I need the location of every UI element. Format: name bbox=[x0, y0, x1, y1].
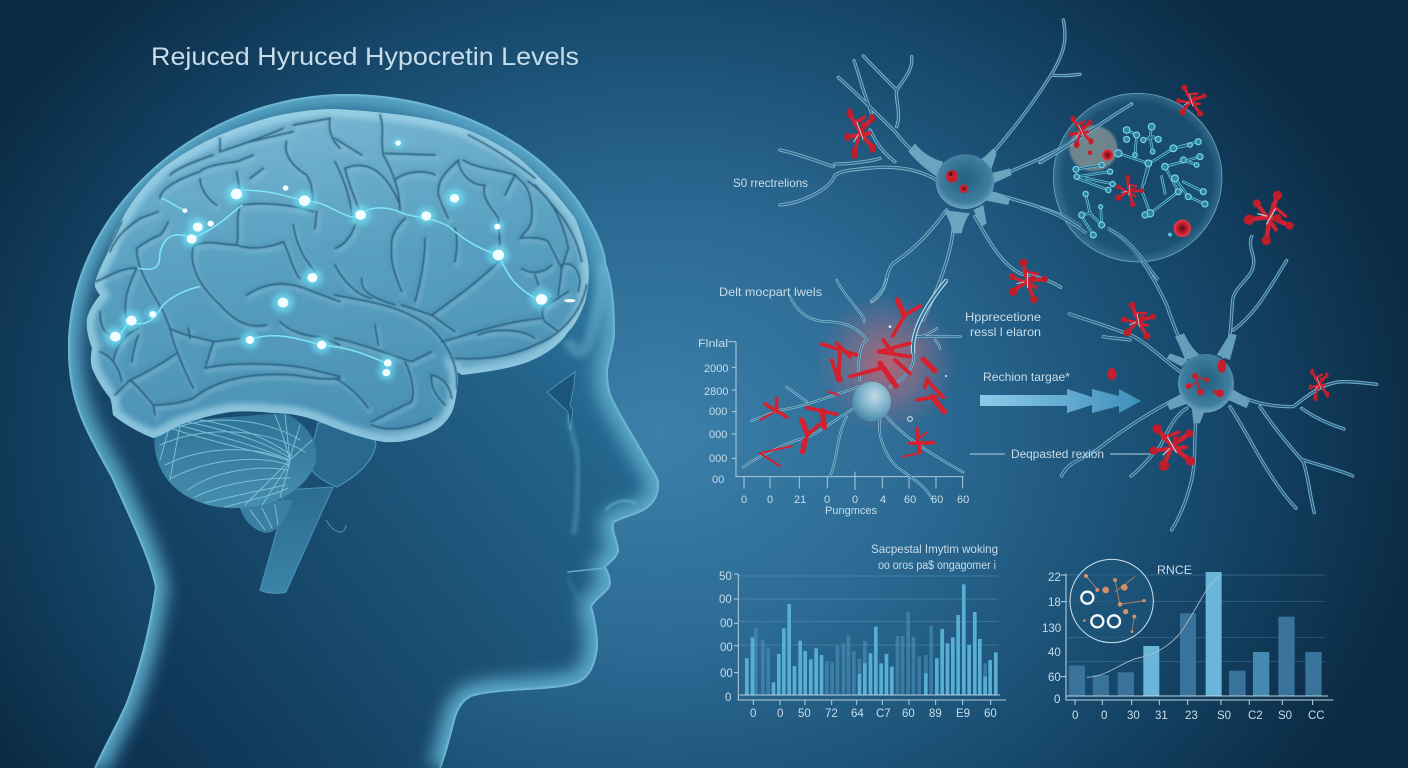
bar chart left: axis labels: 00 bbox=[719, 594, 732, 606]
glowing nodes bbox=[105, 138, 576, 380]
bar chart left: axis labels bbox=[719, 571, 997, 720]
title: Rejuced Hyruced Hypocretin Levels bbox=[151, 43, 579, 71]
bar chart right: axis labels: 130 bbox=[1042, 623, 1061, 635]
line chart labels: 000 bbox=[709, 453, 727, 465]
damaged neuron soma bbox=[852, 382, 891, 422]
bar chart left: axis labels: 00 bbox=[720, 668, 733, 680]
label: relation: ressl l elaron bbox=[970, 325, 1041, 339]
bar chart left: axis labels: 72 bbox=[825, 708, 838, 720]
line chart labels: Pungmces bbox=[825, 505, 877, 517]
bar chart left: axis labels: 64 bbox=[851, 708, 864, 720]
axes bbox=[1061, 573, 1333, 705]
bar chart left: axis labels: 89 bbox=[929, 708, 942, 720]
bar chart left: axis labels: 50 bbox=[719, 571, 732, 583]
bar chart right: axis labels: 30 bbox=[1127, 710, 1140, 722]
bar chart left: axis labels: 60 bbox=[902, 708, 915, 720]
bar chart right: axis labels: 18 bbox=[1048, 597, 1061, 609]
bar chart left: axis labels: E9 bbox=[956, 708, 970, 720]
blue molecule cluster bbox=[1073, 123, 1208, 238]
bar chart right: axis labels: 40 bbox=[1048, 647, 1061, 659]
chart axes bbox=[728, 342, 963, 490]
head silhouette bbox=[68, 94, 659, 768]
line chart labels: 4 bbox=[880, 494, 886, 506]
bar chart left: axis labels: 50 bbox=[798, 708, 811, 720]
bars bbox=[1069, 572, 1322, 696]
cerebellum bbox=[154, 413, 316, 533]
bar chart left: heading: Sacpestal Imytim woking bbox=[871, 542, 998, 556]
line chart labels: 2800 bbox=[704, 386, 728, 398]
brain stem and pons bbox=[260, 422, 376, 593]
bar chart left: axis labels: C7 bbox=[876, 708, 891, 720]
glowing neural pathway bbox=[105, 138, 576, 380]
gridlines bbox=[738, 576, 998, 645]
bar chart right: axis labels: S0 bbox=[1278, 710, 1292, 722]
bar chart left: axis labels: 0 bbox=[777, 708, 783, 720]
line chart labels: 000 bbox=[709, 406, 727, 418]
bar chart right: axis labels: 23 bbox=[1185, 710, 1198, 722]
bar chart left: axis labels: 0 bbox=[750, 708, 756, 720]
bar chart right: axis labels: S0 bbox=[1217, 710, 1231, 722]
red hypocretin fragments bbox=[760, 300, 944, 466]
bar chart right: axis labels: 60 bbox=[1048, 672, 1061, 684]
icon: eye socket bbox=[547, 372, 575, 430]
line chart labels: 00 bbox=[712, 474, 724, 486]
bar chart right: axis labels: 31 bbox=[1155, 710, 1168, 722]
bright bars bbox=[745, 584, 998, 695]
line chart labels: 0 bbox=[767, 494, 773, 506]
bar chart right: axis labels: 0 bbox=[1101, 710, 1107, 722]
line chart with damaged neuron bbox=[728, 280, 963, 498]
neuron: lower right bbox=[1062, 228, 1377, 530]
bar chart right: axis labels bbox=[1042, 572, 1325, 722]
neuron soma bbox=[1167, 333, 1250, 423]
brain bbox=[87, 109, 589, 442]
line chart labels bbox=[698, 338, 969, 517]
neuron: upper bbox=[780, 20, 1080, 320]
sphere: molecule detail bbox=[1040, 93, 1222, 280]
line chart labels: 60 bbox=[904, 494, 916, 506]
red molecules on neurons bbox=[844, 83, 1329, 471]
bar chart right: axis labels: 0 bbox=[1072, 710, 1078, 722]
arrow bbox=[980, 389, 1141, 413]
bar chart left: axis labels: 60 bbox=[984, 708, 997, 720]
bar chart right: axis labels: C2 bbox=[1248, 710, 1263, 722]
bar chart left: heading bbox=[871, 542, 998, 572]
bar chart left: axis labels: 00 bbox=[720, 642, 733, 654]
line chart labels: 21 bbox=[794, 494, 806, 506]
line chart labels: 0 bbox=[824, 494, 830, 506]
faint bars bbox=[754, 612, 987, 695]
line chart labels: 0 bbox=[852, 494, 858, 506]
line chart labels: Flnlal bbox=[698, 338, 728, 350]
bar chart right: axis labels: CC bbox=[1308, 710, 1325, 722]
bar chart: left bbox=[734, 574, 1006, 705]
line chart labels: 0 bbox=[741, 494, 747, 506]
line chart labels: 60 bbox=[931, 494, 943, 506]
bar chart left: axis labels: 0 bbox=[725, 692, 731, 704]
line chart labels: 60 bbox=[957, 494, 969, 506]
bar chart right: heading: RNCE bbox=[1157, 563, 1192, 577]
bar chart right: axis labels: 22 bbox=[1048, 572, 1061, 584]
label: hypocretin: Hpprecetione bbox=[965, 310, 1041, 324]
label: upper neuron: S0 rrectrelions bbox=[733, 176, 808, 190]
line chart labels: 2000 bbox=[704, 363, 728, 375]
face contour lines bbox=[568, 417, 635, 600]
inset circle bbox=[1070, 559, 1153, 643]
label: depleted region with leader lines: Deqpasted rexion bbox=[1011, 447, 1104, 461]
bar chart right: axis labels: 0 bbox=[1054, 694, 1060, 706]
line chart labels: 000 bbox=[709, 429, 727, 441]
bar chart: right bbox=[1061, 559, 1333, 705]
bar chart left: axis labels: 00 bbox=[720, 618, 733, 630]
label: reduction target: Rechion targae* bbox=[983, 370, 1070, 384]
neuron soma bbox=[908, 143, 1012, 233]
bar chart left: heading: oo oros pa$ ongagomer i bbox=[878, 560, 996, 572]
trend line bbox=[1087, 575, 1222, 677]
label: levels: Delt mocpart lwels bbox=[719, 285, 822, 299]
